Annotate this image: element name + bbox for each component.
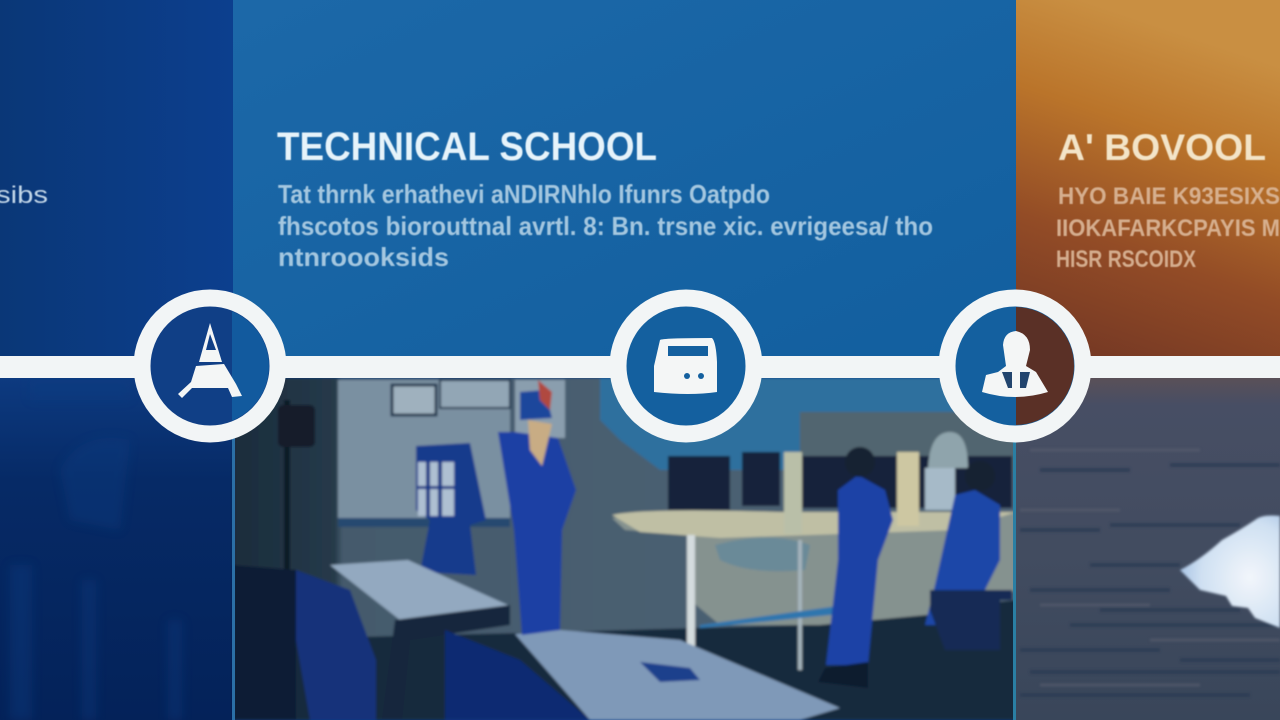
panel background — [0, 0, 233, 356]
timeline node: radio icon — [618, 298, 754, 434]
panel divider lines — [232, 378, 1016, 720]
heading: TECHNICAL SCHOOL — [277, 125, 657, 169]
panel: technical school — [233, 0, 1016, 356]
panel background — [233, 0, 1016, 356]
desks — [330, 560, 510, 620]
windows and columns on desk — [784, 452, 802, 534]
description text: Tat thrnk erhathevi aNDIRNhlo Ifunrs Oatpdo — [278, 179, 770, 209]
heading: A' BOVOOL — [1058, 127, 1266, 168]
photo: sea and wave — [1016, 378, 1280, 720]
student 1 — [498, 380, 576, 635]
blue wall strip — [600, 378, 1016, 470]
panel background — [1016, 0, 1280, 356]
timeline bar — [0, 356, 1280, 378]
tripod stand — [278, 400, 315, 720]
panel: left column — [0, 0, 233, 720]
posters — [392, 385, 436, 415]
desk markings — [640, 662, 700, 682]
floor — [233, 600, 1016, 720]
photo: silhouetted crowd — [0, 378, 233, 720]
display stand — [416, 443, 486, 575]
description text — [278, 179, 933, 272]
chairs — [296, 570, 376, 720]
timeline node: cone icon — [142, 298, 282, 434]
monitors — [668, 452, 1012, 510]
room background — [233, 378, 1016, 720]
description text: HISR RSCOIDX — [1056, 246, 1196, 273]
icon: person — [982, 331, 1048, 397]
round desk — [612, 511, 1016, 670]
photo: classroom with students — [233, 378, 1016, 720]
description text: fhscotos biorouttnal avrtl. 8: Bn. trsne xic. evrigeesa/ tho — [278, 211, 933, 241]
description text — [1056, 183, 1280, 273]
icon: radio — [654, 338, 717, 394]
timeline node: person icon — [947, 298, 1083, 434]
student 3 — [925, 461, 1012, 650]
whiteboard — [338, 380, 510, 522]
panel: right column — [1016, 0, 1280, 720]
student 2 — [818, 447, 893, 688]
wave — [1180, 516, 1280, 628]
icon: cone — [178, 323, 242, 398]
description text: ntnroooksids — [278, 242, 449, 272]
